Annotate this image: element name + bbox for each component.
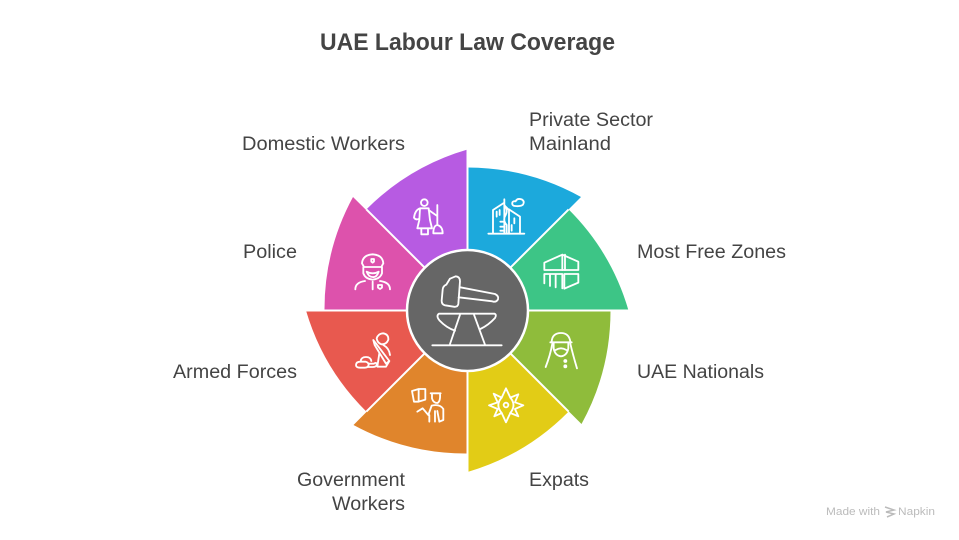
segment: domestic workers <box>366 150 468 310</box>
icon: free zones gate <box>544 255 578 289</box>
label: private sector mainland: Mainland <box>529 134 611 155</box>
icon: domestic worker <box>414 199 443 234</box>
label: armed forces: Armed Forces <box>173 362 297 383</box>
label: government workers <box>297 470 406 515</box>
label: government workers: Government <box>297 470 406 491</box>
center circle <box>407 250 528 371</box>
label: police: Police <box>243 242 297 263</box>
label: expats: Expats <box>529 470 589 491</box>
icon: UAE national <box>546 333 577 368</box>
label: private sector mainland: Private Sector <box>529 110 654 131</box>
icon: police officer <box>355 254 390 289</box>
segment: most free zones <box>468 209 628 310</box>
label: domestic workers: Domestic Workers <box>242 134 405 155</box>
watermark: made with Napkin: Made with <box>826 506 880 518</box>
segment: private sector mainland <box>468 168 581 310</box>
label: government workers: Workers <box>332 494 405 515</box>
segment: expats <box>468 310 569 472</box>
label: private sector mainland <box>529 110 654 155</box>
label: most free zones: Most Free Zones <box>637 242 786 263</box>
icon: government worker <box>412 389 443 422</box>
icon: expats star <box>489 388 523 422</box>
icon: hammer and anvil <box>432 276 502 345</box>
icon: armed forces soldier <box>356 333 390 368</box>
wheel: coverage segments <box>300 145 635 476</box>
segment: government workers <box>354 310 468 454</box>
segment: police <box>324 197 468 310</box>
title: UAE Labour Law Coverage <box>320 29 615 56</box>
segment: armed forces <box>306 310 468 412</box>
watermark: made with Napkin: Napkin <box>898 506 935 518</box>
label: UAE nationals: UAE Nationals <box>637 362 764 383</box>
segment: UAE nationals <box>468 310 611 424</box>
icon: private sector buildings <box>488 199 524 234</box>
watermark: made with Napkin <box>826 506 935 518</box>
